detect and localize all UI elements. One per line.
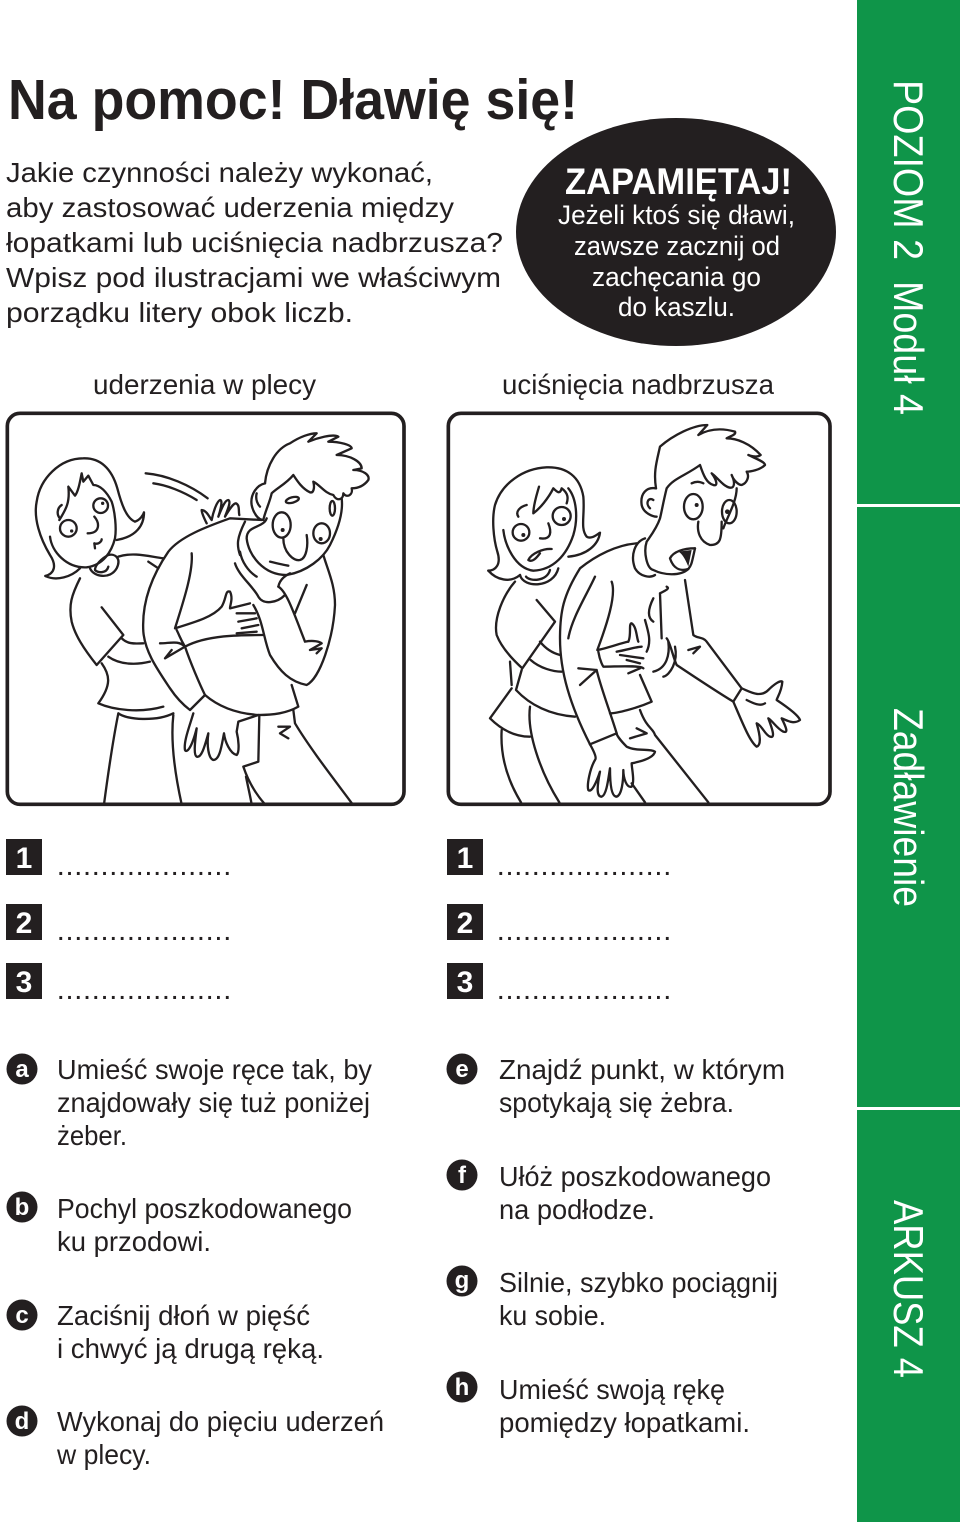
- callout: remember: [516, 118, 836, 346]
- step a: a: [15, 1056, 29, 1083]
- step b: b: [15, 1194, 29, 1221]
- step e: Znajdź punkt, w którym: [499, 1054, 785, 1085]
- step c: c: [15, 1302, 29, 1329]
- number 3: [447, 963, 483, 999]
- step g: g: [455, 1267, 469, 1294]
- intro text block: [6, 157, 503, 328]
- panel: abdominal thrusts illustration: [448, 413, 830, 804]
- green sidebar: [857, 0, 960, 1522]
- intro text block: porządku litery obok liczb.: [6, 297, 353, 328]
- intro text block: aby zastosować uderzenia między: [6, 192, 454, 223]
- step g: [446, 1266, 778, 1331]
- woman figure: [36, 458, 173, 804]
- man figure: [143, 433, 369, 804]
- step a: żeber.: [57, 1120, 127, 1151]
- callout: remember: Jeżeli ktoś się dławi,: [558, 200, 795, 230]
- number 3: [6, 963, 42, 999]
- step d: d: [15, 1408, 29, 1435]
- step h: h: [455, 1374, 469, 1401]
- sidebar label: topic: Zadławienie: [885, 708, 932, 907]
- step f: f: [458, 1162, 467, 1189]
- step f: [446, 1160, 771, 1225]
- callout: remember: zawsze zacznij od: [574, 231, 780, 261]
- heading: abdominal thrusts: uciśnięcia nadbrzusza: [502, 369, 774, 400]
- step d: w plecy.: [56, 1439, 151, 1470]
- heading: back blows: uderzenia w plecy: [93, 369, 316, 400]
- step e: [446, 1054, 785, 1118]
- intro text block: łopatkami lub uciśnięcia nadbrzusza?: [6, 227, 503, 258]
- number 3: 3: [457, 966, 473, 999]
- callout: remember: zachęcania go: [592, 262, 761, 292]
- answer list: back blows: [6, 839, 230, 1004]
- woman figure: [488, 467, 600, 802]
- number 1: 1: [457, 842, 473, 875]
- step c: [6, 1300, 324, 1364]
- answer list: abdominal thrusts: [447, 839, 670, 1004]
- step g: Silnie, szybko pociągnij: [499, 1267, 778, 1298]
- dots 1: ....................: [58, 858, 230, 880]
- step c: Zaciśnij dłoń w pięść: [57, 1300, 310, 1331]
- motion lines: [146, 473, 208, 500]
- step a: Umieść swoje ręce tak, by: [57, 1054, 372, 1085]
- step g: ku sobie.: [499, 1300, 606, 1331]
- number 2: [447, 904, 483, 940]
- title: Na pomoc! Dławię się!: [8, 68, 578, 132]
- sidebar label: sheet: ARKUSZ 4: [885, 1200, 932, 1378]
- step e: e: [455, 1056, 469, 1083]
- step f: na podłodze.: [499, 1194, 655, 1225]
- sidebar label: level and module: POZIOM 2 Moduł 4: [885, 80, 932, 415]
- dots 3: ....................: [58, 982, 230, 1004]
- step h: [446, 1372, 750, 1438]
- step h: Umieść swoją rękę: [499, 1374, 725, 1405]
- number 3: 3: [16, 966, 32, 999]
- number 1: 1: [16, 842, 32, 875]
- step a: [6, 1054, 372, 1151]
- callout: remember: do kaszlu.: [618, 292, 735, 322]
- man figure: [560, 425, 800, 802]
- intro text block: Wpisz pod ilustracjami we właściwym: [6, 262, 501, 293]
- step h: pomiędzy łopatkami.: [499, 1407, 750, 1438]
- step d: Wykonaj do pięciu uderzeń: [57, 1406, 384, 1437]
- number 2: 2: [16, 907, 32, 940]
- step c: i chwyć ją drugą ręką.: [57, 1333, 324, 1364]
- callout: remember: ZAPAMIĘTAJ!: [565, 161, 792, 202]
- step a: znajdowały się tuż poniżej: [57, 1087, 370, 1118]
- step b: [6, 1192, 352, 1257]
- step b: Pochyl poszkodowanego: [57, 1193, 352, 1224]
- dots 3: ....................: [498, 982, 670, 1004]
- number 1: [6, 839, 42, 875]
- step d: [6, 1406, 384, 1470]
- number 2: 2: [457, 907, 473, 940]
- step f: Ułóż poszkodowanego: [499, 1161, 771, 1192]
- number 2: [6, 904, 42, 940]
- dots 1: ....................: [498, 858, 670, 880]
- number 1: [447, 839, 483, 875]
- panel: back blows illustration: [7, 413, 404, 804]
- step e: spotykają się żebra.: [499, 1087, 734, 1118]
- dots 2: ....................: [498, 923, 670, 945]
- dots 2: ....................: [58, 923, 230, 945]
- intro text block: Jakie czynności należy wykonać,: [6, 157, 433, 188]
- step b: ku przodowi.: [57, 1226, 211, 1257]
